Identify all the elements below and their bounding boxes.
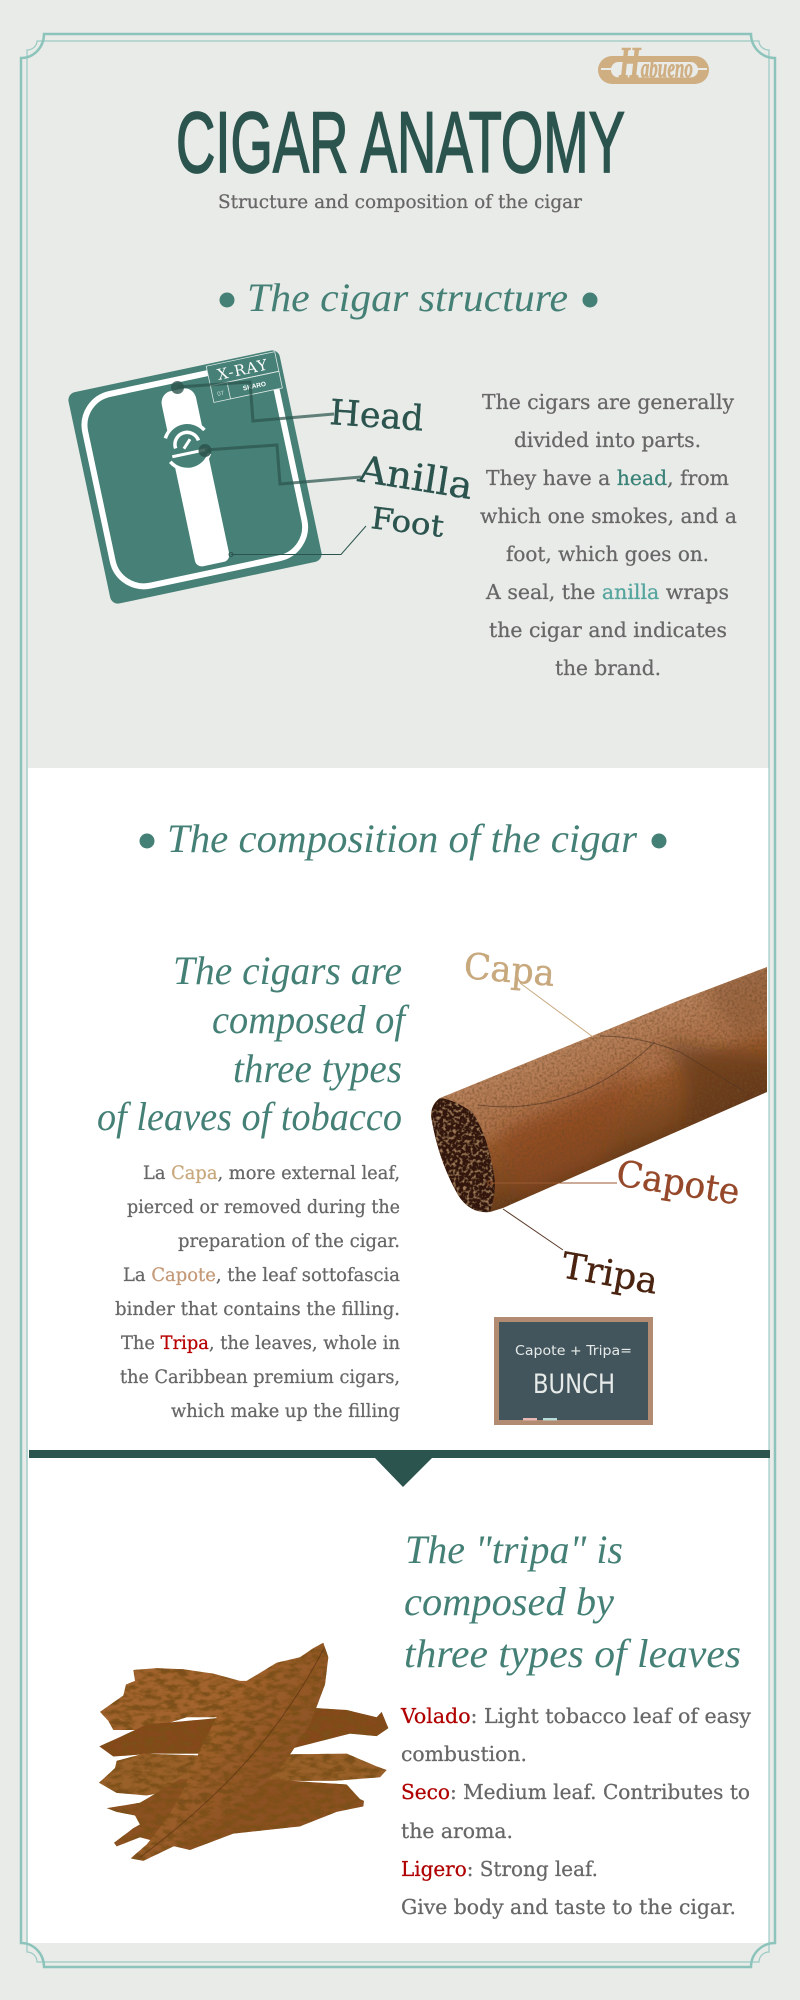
- logo: Habueno: Habueno: [618, 38, 693, 87]
- label: capote: Capote: [614, 1153, 742, 1213]
- subheading: tripa composition: three types of leaves: [404, 1631, 741, 1676]
- pointer: head: [171, 381, 334, 421]
- front leaf: [131, 1643, 328, 1861]
- back leaves: [99, 1668, 388, 1850]
- front leaf midrib: [140, 1648, 324, 1857]
- text block: capa, capote, tripa description: the Caribbean premium cigars,: [120, 1367, 400, 1388]
- text block: structure description: They have a head, from: [486, 466, 729, 490]
- illustration: cigar cross-section: [431, 967, 767, 1212]
- text block: volado, seco, ligero: Seco: Medium leaf. Contributes to: [401, 1780, 750, 1804]
- pointer: anilla: [198, 444, 361, 484]
- label: foot: Foot: [369, 501, 446, 545]
- label: capa: [462, 946, 593, 1037]
- label: anilla: Anilla: [355, 447, 476, 508]
- text block: volado, seco, ligero: the aroma.: [401, 1819, 513, 1843]
- subheading: three types of leaves: composed of: [212, 997, 410, 1042]
- text block: volado, seco, ligero: combustion.: [401, 1742, 527, 1766]
- subheading: three types of leaves: of leaves of tobacco: [97, 1094, 402, 1139]
- text block: structure description: which one smokes, and a: [480, 504, 737, 528]
- subheading: three types of leaves: three types: [233, 1046, 402, 1091]
- text block: volado, seco, ligero: [400, 1704, 751, 1919]
- illustration: tobacco leaves: [99, 1643, 388, 1861]
- diagram: x-ray cigar structure: [67, 349, 476, 605]
- subheading: tripa composition: composed by: [404, 1579, 614, 1624]
- subtitle: Structure and composition of the cigar: [218, 191, 583, 213]
- text block: capa, capote, tripa description: La Capa, more external leaf,: [143, 1163, 400, 1184]
- subheading: three types of leaves: [97, 948, 410, 1139]
- text block: capa, capote, tripa description: pierced or removed during the: [127, 1197, 400, 1218]
- divider with pointer: [29, 1450, 770, 1487]
- wrapper seams: [478, 1036, 745, 1107]
- subheading: three types of leaves: The cigars are: [173, 948, 402, 993]
- text block: structure description: the cigar and indicates: [489, 618, 727, 642]
- subheading: tripa composition: [404, 1527, 741, 1676]
- cut end filler: [431, 1098, 495, 1212]
- text block: capa, capote, tripa description: The Tripa, the leaves, whole in: [121, 1333, 400, 1354]
- text block: capa, capote, tripa description: binder that contains the filling.: [115, 1299, 400, 1320]
- text block: structure description: [480, 390, 737, 680]
- label: tripa: [503, 1209, 661, 1303]
- text block: structure description: foot, which goes on.: [506, 542, 709, 566]
- text block: capa, capote, tripa description: [115, 1163, 400, 1422]
- text block: volado, seco, ligero: Give body and taste to the cigar.: [401, 1895, 736, 1919]
- chalkboard: capote + tripa = bunch: BUNCH: [533, 1369, 615, 1400]
- cigar wrapper: [431, 967, 767, 1212]
- x-ray card: 07: [217, 391, 225, 398]
- text block: capa, capote, tripa description: which make up the filling: [171, 1401, 400, 1422]
- text block: capa, capote, tripa description: La Capote, the leaf sottofascia: [123, 1265, 400, 1286]
- label: head: Head: [328, 393, 425, 440]
- text block: structure description: The cigars are generally: [482, 390, 734, 414]
- text block: volado, seco, ligero: Volado: Light tobacco leaf of easy: [400, 1704, 751, 1728]
- text block: structure description: divided into parts.: [514, 428, 701, 452]
- subheading: tripa composition: The "tripa" is: [405, 1527, 623, 1572]
- text block: capa, capote, tripa description: preparation of the cigar.: [178, 1231, 400, 1252]
- chalkboard: capote + tripa = bunch: Capote + Tripa=: [515, 1344, 632, 1359]
- pointer: foot: [229, 526, 366, 556]
- heading: the composition of the cigar: The composition of the cigar: [167, 816, 637, 861]
- chalkboard: capote + tripa = bunch: [494, 1317, 653, 1425]
- x-ray card: [67, 349, 323, 605]
- label: tripa: Tripa: [558, 1245, 661, 1303]
- text block: volado, seco, ligero: Ligero: Strong leaf.: [401, 1857, 598, 1881]
- text block: structure description: A seal, the anilla wraps: [485, 580, 729, 604]
- heading: the cigar structure: The cigar structure: [247, 275, 568, 320]
- text block: structure description: the brand.: [555, 656, 661, 680]
- panel: composition white background: [28, 768, 769, 1943]
- label: capote: [488, 1153, 742, 1213]
- x-ray card: X-RAY: [216, 356, 270, 384]
- x-ray card: SKARO: [242, 381, 267, 393]
- label: capa: Capa: [462, 946, 556, 995]
